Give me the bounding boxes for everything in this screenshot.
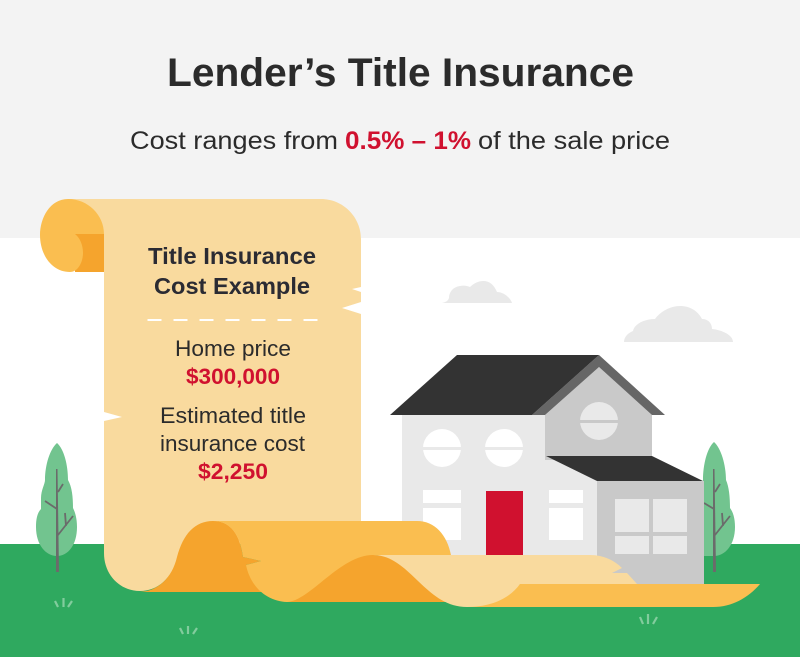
extension window: [615, 499, 687, 554]
home price: $300,000: [186, 364, 280, 389]
home price: Home price: [175, 336, 291, 361]
rectangular windows: [423, 490, 461, 503]
gable roof trim: [532, 355, 665, 415]
house: [390, 355, 704, 585]
rolled fold: [213, 521, 451, 602]
title: Lender’s Title Insurance: [167, 51, 634, 95]
curl: [40, 199, 104, 272]
subtitle: [130, 127, 670, 155]
scroll heading: Title Insurance: [148, 243, 316, 269]
second fold dark: [287, 555, 450, 602]
estimated cost: insurance cost: [160, 431, 305, 456]
dashed divider: [148, 319, 318, 321]
subtitle: 0.5% – 1%: [345, 127, 471, 155]
cloud: small: [442, 281, 512, 303]
estimated cost: [160, 403, 306, 484]
door: [486, 491, 523, 555]
subtitle: of the sale price: [478, 127, 670, 155]
main wall: [402, 415, 598, 565]
green ground: [0, 544, 800, 657]
grass tufts: [55, 598, 657, 634]
lower roof: [546, 456, 703, 481]
scroll: [40, 199, 760, 607]
main roof: [390, 355, 599, 415]
round windows: [423, 429, 461, 467]
estimated cost: Estimated title: [160, 403, 306, 428]
tree: right: [703, 442, 735, 572]
cloud: large: [624, 306, 733, 342]
extension wall: [597, 481, 704, 585]
scroll heading: [148, 243, 316, 299]
scroll heading: Cost Example: [154, 273, 310, 299]
lower paper band: [373, 555, 637, 607]
lower orange band: [467, 584, 760, 607]
curl shadow: [75, 234, 104, 272]
first fold dark: [140, 521, 262, 592]
subtitle: Cost ranges from: [130, 127, 338, 155]
top header band: [0, 0, 800, 238]
tree: left: [36, 443, 77, 572]
gable wall: [545, 367, 652, 460]
home price: [175, 336, 291, 389]
gable round window: [580, 402, 618, 440]
paper body: [68, 199, 361, 591]
estimated cost: $2,250: [198, 459, 268, 484]
